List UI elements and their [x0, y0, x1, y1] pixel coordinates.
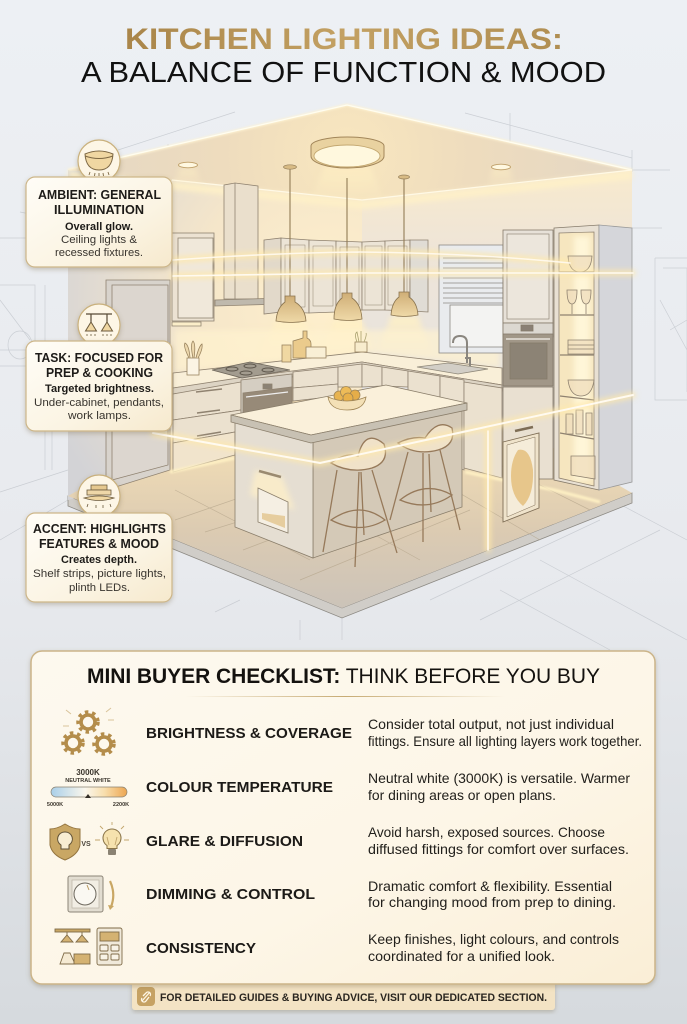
panel: mini buyer checklist	[31, 651, 655, 984]
left tall cabinet	[106, 280, 170, 490]
bar stools	[323, 425, 460, 567]
pendant lights	[276, 165, 418, 322]
card text	[33, 521, 166, 594]
icon: dimmer	[68, 876, 114, 912]
card text: FEATURES & MOOD	[39, 536, 159, 551]
description	[368, 824, 629, 857]
icon: picture light	[78, 475, 120, 517]
architectural sketch lines	[0, 112, 687, 650]
card text: ACCENT: HIGHLIGHTS	[33, 521, 166, 536]
light cones	[172, 165, 516, 365]
description	[368, 770, 630, 803]
description	[368, 716, 642, 749]
card text	[38, 187, 161, 259]
card text: ILLUMINATION	[54, 202, 144, 217]
card text: work lamps.	[67, 410, 131, 422]
title: KITCHEN LIGHTING IDEAS:	[125, 23, 563, 56]
title	[81, 23, 606, 89]
description: Consider total output, not just individual	[368, 716, 614, 732]
back walls	[68, 170, 362, 500]
description: coordinated for a unified look.	[368, 948, 555, 964]
description: diffused fittings for comfort over surfaces.	[368, 841, 629, 857]
row: glare and diffusion: GLARE & DIFFUSION	[146, 833, 303, 850]
description: fittings. Ensure all lighting layers work together.	[368, 733, 642, 749]
callout: ambient	[26, 140, 172, 267]
island	[231, 385, 467, 558]
card text: Targeted brightness.	[45, 383, 154, 395]
icon: shield vs bulb: VS	[81, 841, 91, 848]
callout: accent	[26, 475, 172, 602]
ceiling	[68, 105, 632, 205]
plinth glow	[170, 458, 600, 502]
shelf items	[566, 256, 595, 479]
card text: plinth LEDs.	[69, 582, 130, 594]
counter	[173, 352, 502, 394]
display cabinet	[554, 225, 632, 490]
window with blinds	[439, 245, 503, 353]
stovetop	[212, 362, 290, 378]
description: for changing mood from prep to dining.	[368, 894, 616, 910]
description	[368, 878, 616, 910]
description: Avoid harsh, exposed sources. Choose	[368, 824, 605, 840]
row: dimming and control	[68, 876, 616, 912]
ceiling light	[311, 137, 384, 168]
icon: shield vs bulb	[50, 822, 129, 860]
checklist heading: MINI BUYER CHECKLIST: THINK BEFORE YOU BUY	[87, 665, 600, 688]
card text: recessed fixtures.	[55, 247, 143, 259]
recessed lights	[178, 162, 510, 170]
description: Neutral white (3000K) is versatile. Warmer	[368, 770, 630, 786]
icon: temperature scale: NEUTRAL WHITE	[65, 778, 111, 784]
range hood	[215, 183, 283, 306]
row: brightness and coverage	[63, 708, 642, 754]
sink and faucet	[417, 336, 488, 374]
row: colour temperature	[47, 768, 630, 808]
row: consistency	[55, 928, 619, 965]
callout: task	[26, 304, 172, 431]
icon: temperature scale: 2200K	[113, 802, 129, 808]
row: colour temperature: COLOUR TEMPERATURE	[146, 779, 333, 796]
counter items	[184, 331, 367, 375]
wall picture	[503, 427, 539, 522]
floor	[68, 400, 632, 608]
glowing light lines	[153, 252, 633, 550]
tall oven cabinet	[503, 230, 553, 479]
icon: link	[137, 987, 155, 1006]
fruit bowl	[328, 386, 366, 410]
card text: Under-cabinet, pendants,	[34, 397, 164, 409]
card text: PREP & COOKING	[46, 365, 153, 380]
footer note tab	[132, 980, 555, 1010]
base cabinets	[173, 364, 502, 478]
card text: Ceiling lights &	[61, 234, 138, 246]
card	[26, 513, 172, 602]
footer text: FOR DETAILED GUIDES & BUYING ADVICE, VISIT OUR DEDICATED SECTION.	[160, 992, 547, 1004]
row: consistency: CONSISTENCY	[146, 940, 256, 957]
backsplash glow	[175, 330, 500, 372]
icon: pendants	[78, 304, 120, 346]
icon: temperature scale	[47, 768, 129, 808]
right wall	[362, 170, 632, 420]
icon: temperature scale: 5000K	[47, 802, 63, 808]
description	[368, 931, 619, 964]
card	[26, 341, 172, 431]
island picture light	[250, 470, 295, 533]
kitchen illustration	[68, 105, 633, 618]
icon: temperature scale: 3000K	[76, 768, 100, 777]
left upper cabinet	[172, 233, 214, 326]
card text: TASK: FOCUSED FOR	[35, 350, 164, 365]
card text: Shelf strips, picture lights,	[33, 568, 166, 580]
description: for dining areas or open plans.	[368, 787, 556, 803]
icon: gears	[63, 708, 114, 754]
row: dimming and control: DIMMING & CONTROL	[146, 886, 315, 903]
icon: ceiling light	[78, 140, 120, 182]
card text: Overall glow.	[65, 221, 133, 233]
floor slab	[68, 493, 632, 618]
description: Keep finishes, light colours, and controls	[368, 931, 619, 947]
title: A BALANCE OF FUNCTION & MOOD	[81, 57, 606, 89]
card text: AMBIENT: GENERAL	[38, 187, 161, 202]
row: glare and diffusion	[50, 822, 629, 860]
card	[26, 177, 172, 267]
description: Dramatic comfort & flexibility. Essential	[368, 878, 612, 894]
row: brightness and coverage: BRIGHTNESS & COVERAGE	[146, 725, 352, 742]
card text: Creates depth.	[61, 554, 137, 566]
back upper cabinets	[264, 238, 428, 314]
card text	[34, 350, 164, 422]
icon: matching fixtures	[55, 928, 122, 965]
